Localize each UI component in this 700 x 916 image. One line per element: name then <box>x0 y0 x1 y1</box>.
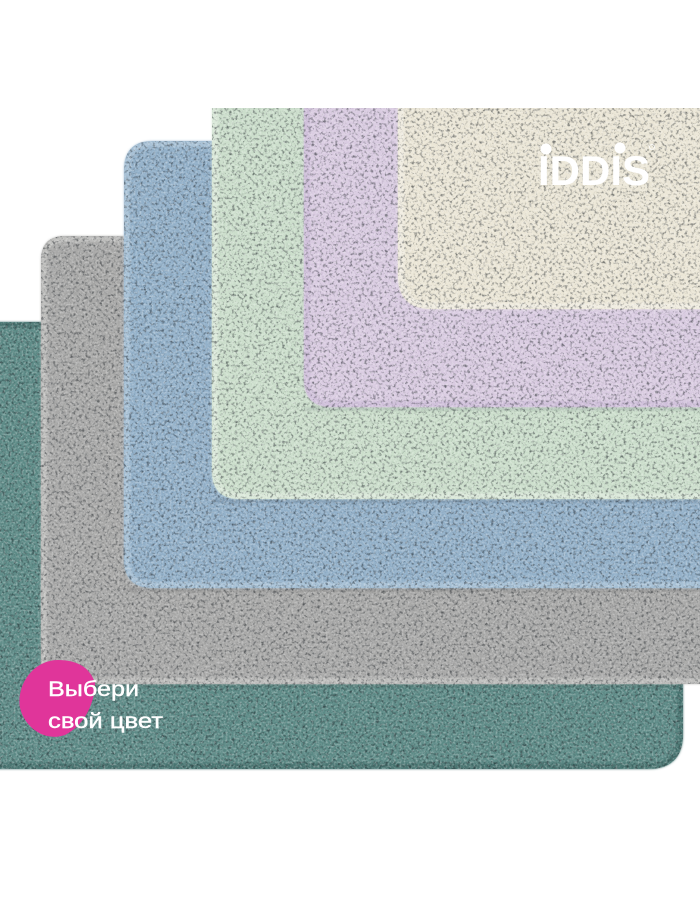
callout text: Выбери <box>48 677 139 701</box>
rug: grey <box>39 236 700 688</box>
pile texture <box>0 108 700 769</box>
callout text: свой цвет <box>48 709 163 733</box>
rug: blue <box>124 141 700 592</box>
rug: lilac <box>304 100 700 411</box>
rug: teal <box>0 322 683 769</box>
rug: mint green <box>212 100 700 503</box>
logo: IDDIS: IDDIS <box>538 147 650 194</box>
pink badge <box>19 660 95 737</box>
white background above the rugs <box>0 0 700 108</box>
callout: choose your colour <box>19 660 163 737</box>
rug: cream <box>398 100 700 309</box>
